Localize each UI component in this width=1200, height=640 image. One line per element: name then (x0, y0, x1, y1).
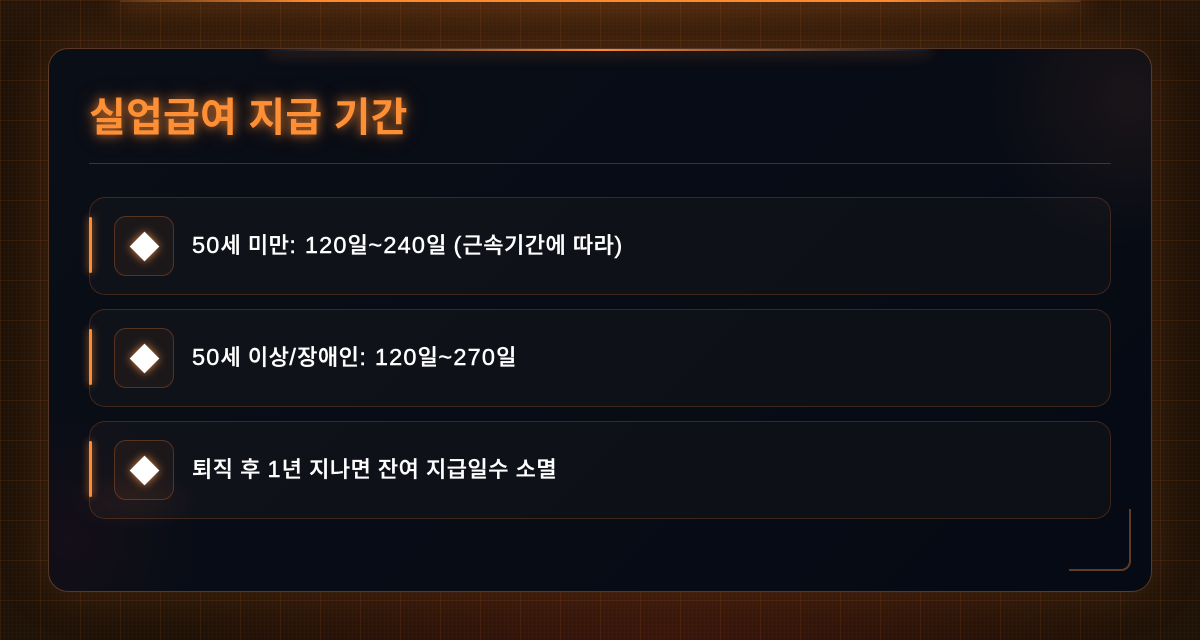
list item 3 (89, 421, 1111, 519)
corner bracket (1069, 509, 1131, 571)
icon: diamond 3 (114, 440, 174, 500)
icon: diamond 2 (114, 328, 174, 388)
text: item 1: 50세 미만: 120일~240일 (근속기간에 따라) (192, 232, 623, 258)
list item 2 (89, 309, 1111, 407)
panel: main card (48, 48, 1152, 592)
list item 1 (89, 197, 1111, 295)
top glowing bar (120, 0, 1080, 2)
text: item 2: 50세 이상/장애인: 120일~270일 (192, 344, 517, 370)
icon: diamond 1 (114, 216, 174, 276)
title: 실업급여 지급 기간 (89, 96, 408, 140)
text: item 3: 퇴직 후 1년 지나면 잔여 지급일수 소멸 (192, 456, 557, 482)
